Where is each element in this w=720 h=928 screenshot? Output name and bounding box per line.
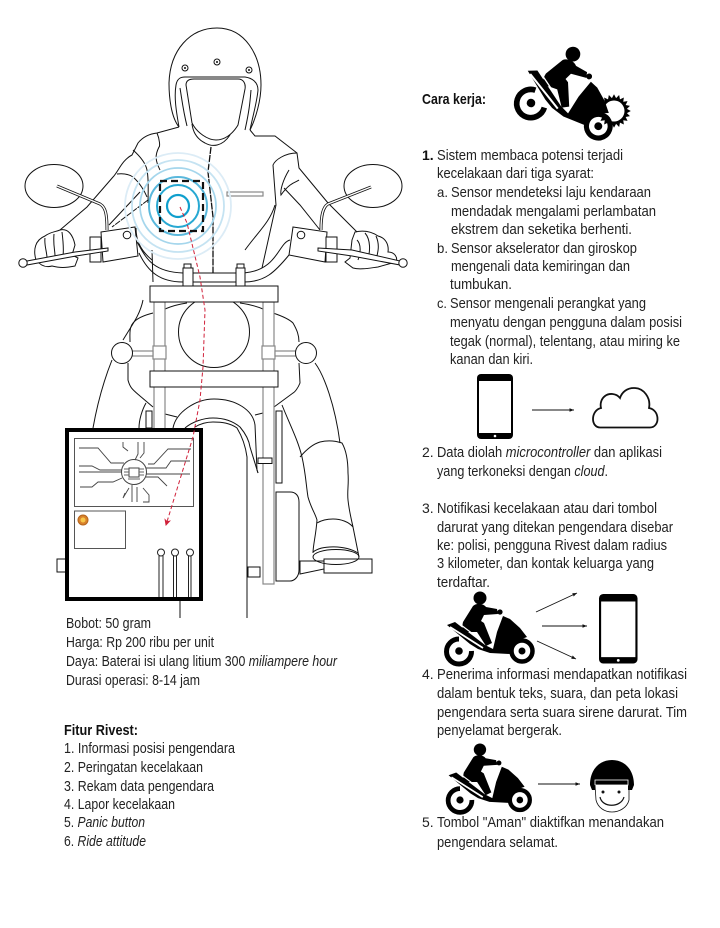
feature list [64,740,236,850]
step 1 text: kecelakaan dari tiga syarat: [437,165,594,182]
red dashed arrow from sensor to device [166,207,205,525]
step 2 text [422,444,662,480]
icon: scooter to smiling rider [448,743,634,812]
turn signals [112,342,316,364]
front forks [132,302,296,584]
specifications text: Harga: Rp 200 ribu per unit [66,634,215,651]
step 4 text: 4. [422,666,434,682]
orange indicator light [78,515,88,525]
step 5 text: pengendara selamat. [437,834,558,851]
jacket and torso [60,124,357,282]
step 1 text: Sensor mengenali perangkat yang [450,295,646,312]
step 3 text: darurat yang ditekan pengendara disebar [437,519,673,536]
feature list: 5. Panic button [64,814,145,831]
step 3 text: 3 kilometer, dan kontak keluarga yang [437,555,654,572]
step 1 text: mengenali data kemiringan dan [451,258,630,275]
illustration: rider on motorcycle, front view [19,28,407,618]
mirrors [25,164,402,230]
step 4 text: penyelamat bergerak. [437,722,562,739]
feature list: 1. Informasi posisi pengendara [64,740,236,757]
step 1 text: b. [437,240,448,256]
feature list: 4. Lapor kecelakaan [64,796,175,813]
step 4 text [422,666,687,739]
step 1 text: Sensor akselerator dan giroskop [451,240,637,257]
step 1 text: ekstrem dan seketika berhenti. [451,221,632,238]
leader line from device [179,601,181,618]
step 3 text: terdaftar. [437,574,490,591]
step 5 text [422,814,664,851]
step 1 text: c. [437,295,447,311]
sensor dashed square [160,181,203,231]
step 2 text: Data diolah microcontroller dan aplikasi [437,444,662,461]
step 1 text: tumbukan. [450,276,512,293]
headlight [178,296,250,368]
specifications text: Durasi operasi: 8-14 jam [66,672,200,689]
battery box [74,511,126,548]
feature list: 2. Peringatan kecelakaan [64,759,203,776]
motorcycle rear wheel and fender [165,303,372,618]
step 2 text: yang terkoneksi dengan cloud. [437,463,608,480]
specifications text: Bobot: 50 gram [66,615,151,632]
step 5 text: Tombol "Aman" diaktifkan menandakan [437,814,664,831]
right hand and control [289,227,407,269]
step 1 text: 1. [422,147,434,163]
step 1 text: a. [437,184,448,200]
circuit board [74,438,194,506]
step 4 text: pengendara serta suara sirene darurat. Tim [437,704,687,721]
helmet [169,28,261,140]
heading: Cara kerja: Cara kerja: [422,91,486,108]
device panel [57,430,201,599]
step 4 text: dalam bentuk teks, suara, dan peta lokasi [437,685,678,702]
step 3 text: 3. [422,500,434,516]
step 1 text: Sistem membaca potensi terjadi [437,147,623,164]
specifications text [66,615,338,689]
feature list: 3. Rekam data pengendara [64,778,215,795]
step 3 text: ke: polisi, pengguna Rivest dalam radius [437,537,667,554]
feature list: 6. Ride attitude [64,833,146,850]
icon: scooter broadcasting to phone [447,592,638,664]
rider legs [93,300,359,564]
step 1 text [422,147,682,368]
lower fork clamp [150,371,278,387]
left hand and control [19,227,138,268]
step 3 text [422,500,673,591]
step 2 text: 2. [422,444,434,460]
step 3 text: Notifikasi kecelakaan atau dari tombol [437,500,657,517]
heading: Fitur Rivest: Fitur Rivest: [64,722,138,739]
step 1 text: Sensor mendeteksi laju kendaraan [451,184,651,201]
handlebar [137,240,290,286]
step 1 text: tegak (normal), telentang, atau miring ke [450,333,680,350]
specifications text: Daya: Baterai isi ulang litium 300 miliampere hour [66,653,338,670]
step 1 text: kanan dan kiri. [450,351,533,368]
sensor signal rings [125,153,231,259]
upper fork clamp [150,286,278,302]
connector pins [158,549,194,597]
icon: phone to cloud [477,374,658,439]
step 4 text: Penerima informasi mendapatkan notifikasi [437,666,687,683]
step 5 text: 5. [422,814,434,830]
step 1 text: mendadak mengalami perlambatan [451,203,656,220]
icon: scooter crash [513,35,631,144]
step 1 text: menyatu dengan pengguna dalam posisi [450,314,682,331]
